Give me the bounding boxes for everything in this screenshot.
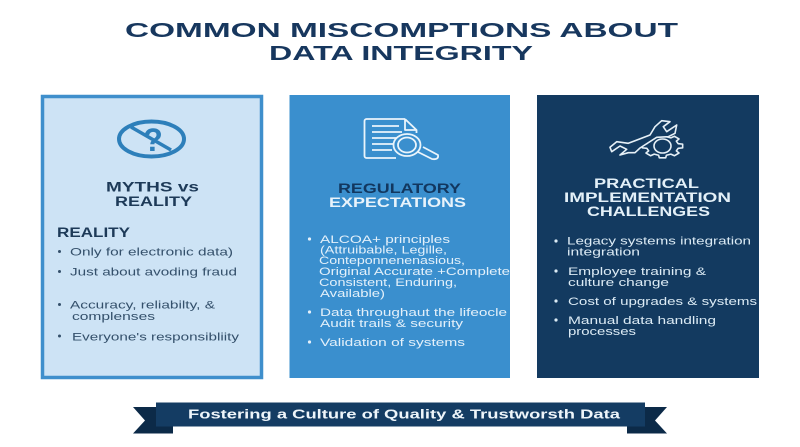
heading: practical implementation challenges: PRACTICAL — [594, 176, 699, 191]
bullet list: reality: complenses — [72, 311, 156, 323]
bullet list: reality: Only for electronic data) — [70, 246, 233, 258]
bullet list: implementation challenges: Manual data handling — [568, 315, 716, 327]
bullet list: implementation challenges — [554, 236, 758, 338]
heading: practical implementation challenges: CHALLENGES — [587, 204, 710, 219]
heading: myths vs reality: REALITY — [115, 194, 192, 209]
bullet list: regulatory requirements: Consistent, Enduring, — [319, 277, 457, 289]
panel: myths vs reality — [42, 96, 262, 378]
bullet list: regulatory requirements: ALCOA+ principles — [320, 234, 451, 246]
banner: Fostering a Culture of Quality & Trustworsth Data — [188, 406, 621, 422]
bullet list: regulatory requirements: Original Accurate +Complete — [319, 266, 510, 278]
heading: practical implementation challenges — [564, 176, 731, 219]
bullet list: implementation challenges: culture change — [568, 277, 669, 289]
icon: crossed-out question mark — [119, 122, 184, 158]
bullet list: reality: Everyone's responsibliity — [72, 332, 240, 344]
bullet list: regulatory requirements: Validation of systems — [320, 337, 466, 349]
bullet list: regulatory requirements — [308, 234, 510, 349]
bullet list: regulatory requirements: Audit trails & security — [320, 318, 464, 330]
title: COMMON MISCOMPTIONS ABOUT — [125, 19, 679, 42]
title — [125, 19, 679, 65]
title: DATA INTEGRITY — [269, 42, 534, 65]
bullet list: regulatory requirements: Data throughaut the lifeocle — [320, 307, 507, 319]
icon: wrench and gear — [610, 121, 683, 158]
subheading: reality: REALITY — [57, 225, 130, 240]
bullet list: reality: Accuracy, reliabilty, & — [70, 300, 216, 312]
bullet list: implementation challenges: processes — [568, 326, 637, 338]
icon: document with magnifier — [364, 119, 438, 159]
panel: practical implementation challenges — [537, 95, 759, 378]
bullet list: regulatory requirements: (Attruibable, Legille, — [320, 244, 447, 256]
panel: regulatory expectations — [290, 95, 510, 378]
banner — [133, 402, 667, 434]
heading: myths vs reality — [106, 180, 199, 209]
heading: myths vs reality: MYTHS vs — [106, 180, 199, 194]
bullet list: implementation challenges: integration — [567, 246, 640, 258]
bullet list: reality — [58, 246, 240, 344]
heading: regulatory expectations: EXPECTATIONS — [329, 195, 466, 210]
heading: regulatory expectations — [329, 181, 466, 210]
bullet list: regulatory requirements: Available) — [320, 288, 385, 300]
bullet list: implementation challenges: Employee training & — [568, 266, 707, 278]
heading: regulatory expectations: REGULATORY — [338, 181, 461, 196]
heading: practical implementation challenges: IMPLEMENTATION — [564, 190, 731, 205]
bullet list: reality: Just about avoding fraud — [70, 266, 237, 278]
icon: crossed-out question mark: ? — [143, 122, 163, 158]
bullet list: implementation challenges: Legacy systems integration — [567, 236, 751, 248]
bullet list: regulatory requirements: Conteponnenenasious, — [319, 255, 465, 267]
bullet list: implementation challenges: Cost of upgrades & systems — [568, 296, 758, 308]
